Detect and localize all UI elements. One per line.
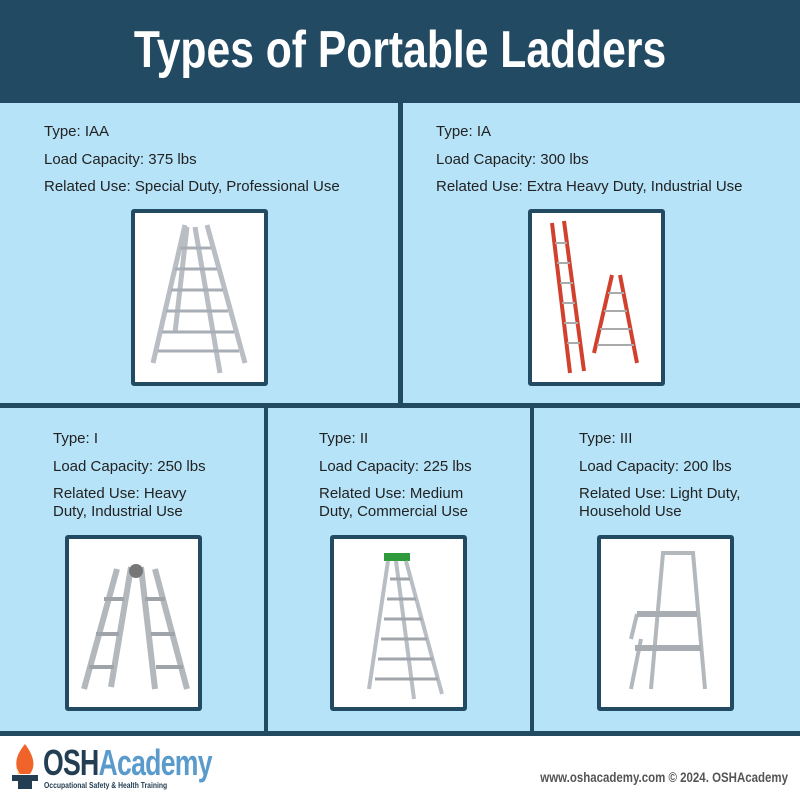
text: Type II: Type: II bbox=[319, 430, 368, 447]
text: Type II: Related Use: Medium bbox=[319, 485, 463, 502]
text: Type I: Duty, Industrial Use bbox=[53, 503, 183, 520]
text: Type I bbox=[53, 430, 206, 520]
text: Type I: Load Capacity: 250 lbs bbox=[53, 458, 206, 474]
title: Types of Portable Ladders bbox=[134, 21, 666, 79]
footer logo bbox=[12, 742, 212, 790]
footer logo: Occupational Safety & Health Training bbox=[44, 781, 167, 790]
image: IA fiberglass ladders bbox=[528, 209, 665, 386]
text: Type I: Related Use: Heavy bbox=[53, 485, 186, 502]
text: Type IAA: Related Use: Special Duty, Professional Use bbox=[44, 178, 340, 195]
text: Type III bbox=[579, 430, 740, 520]
image: IAA stepladder bbox=[131, 209, 268, 386]
icon: torch bbox=[12, 744, 38, 789]
text: Type II: Duty, Commercial Use bbox=[319, 503, 468, 520]
text: Type IAA: Type: IAA bbox=[44, 123, 109, 140]
text: Type IA: Type: IA bbox=[436, 123, 491, 140]
panel: Type II bbox=[319, 430, 472, 711]
text: Type IAA: Load Capacity: 375 lbs bbox=[44, 150, 197, 168]
text: Type II: Load Capacity: 225 lbs bbox=[319, 458, 472, 474]
image: multi-position ladder bbox=[65, 535, 202, 711]
panel: Type I bbox=[53, 430, 206, 711]
header bar bbox=[0, 0, 800, 103]
text: Type IA: Related Use: Extra Heavy Duty, Industrial Use bbox=[436, 178, 743, 195]
text: Type III: Related Use: Light Duty, bbox=[579, 485, 740, 502]
panel: Type IAA bbox=[44, 123, 340, 386]
text: Type III: Load Capacity: 200 lbs bbox=[579, 458, 732, 474]
image: step stool bbox=[597, 535, 734, 711]
text: Type IAA bbox=[44, 123, 340, 195]
text: Type IA bbox=[436, 123, 743, 195]
text: Type IA: Load Capacity: 300 lbs bbox=[436, 150, 589, 168]
panel: Type IA bbox=[436, 123, 743, 386]
panel background area bbox=[0, 103, 800, 733]
text: Type II bbox=[319, 430, 472, 520]
text: Type III: Household Use bbox=[579, 503, 682, 520]
panel: Type III bbox=[579, 430, 740, 711]
text: Type I: Type: I bbox=[53, 430, 98, 447]
text: Type III: Type: III bbox=[579, 430, 632, 447]
image: stepladder with green top bbox=[330, 535, 467, 711]
logo text: OSHAcademy bbox=[43, 742, 212, 783]
footer credit: www.oshacademy.com © 2024. OSHAcademy bbox=[540, 769, 788, 785]
